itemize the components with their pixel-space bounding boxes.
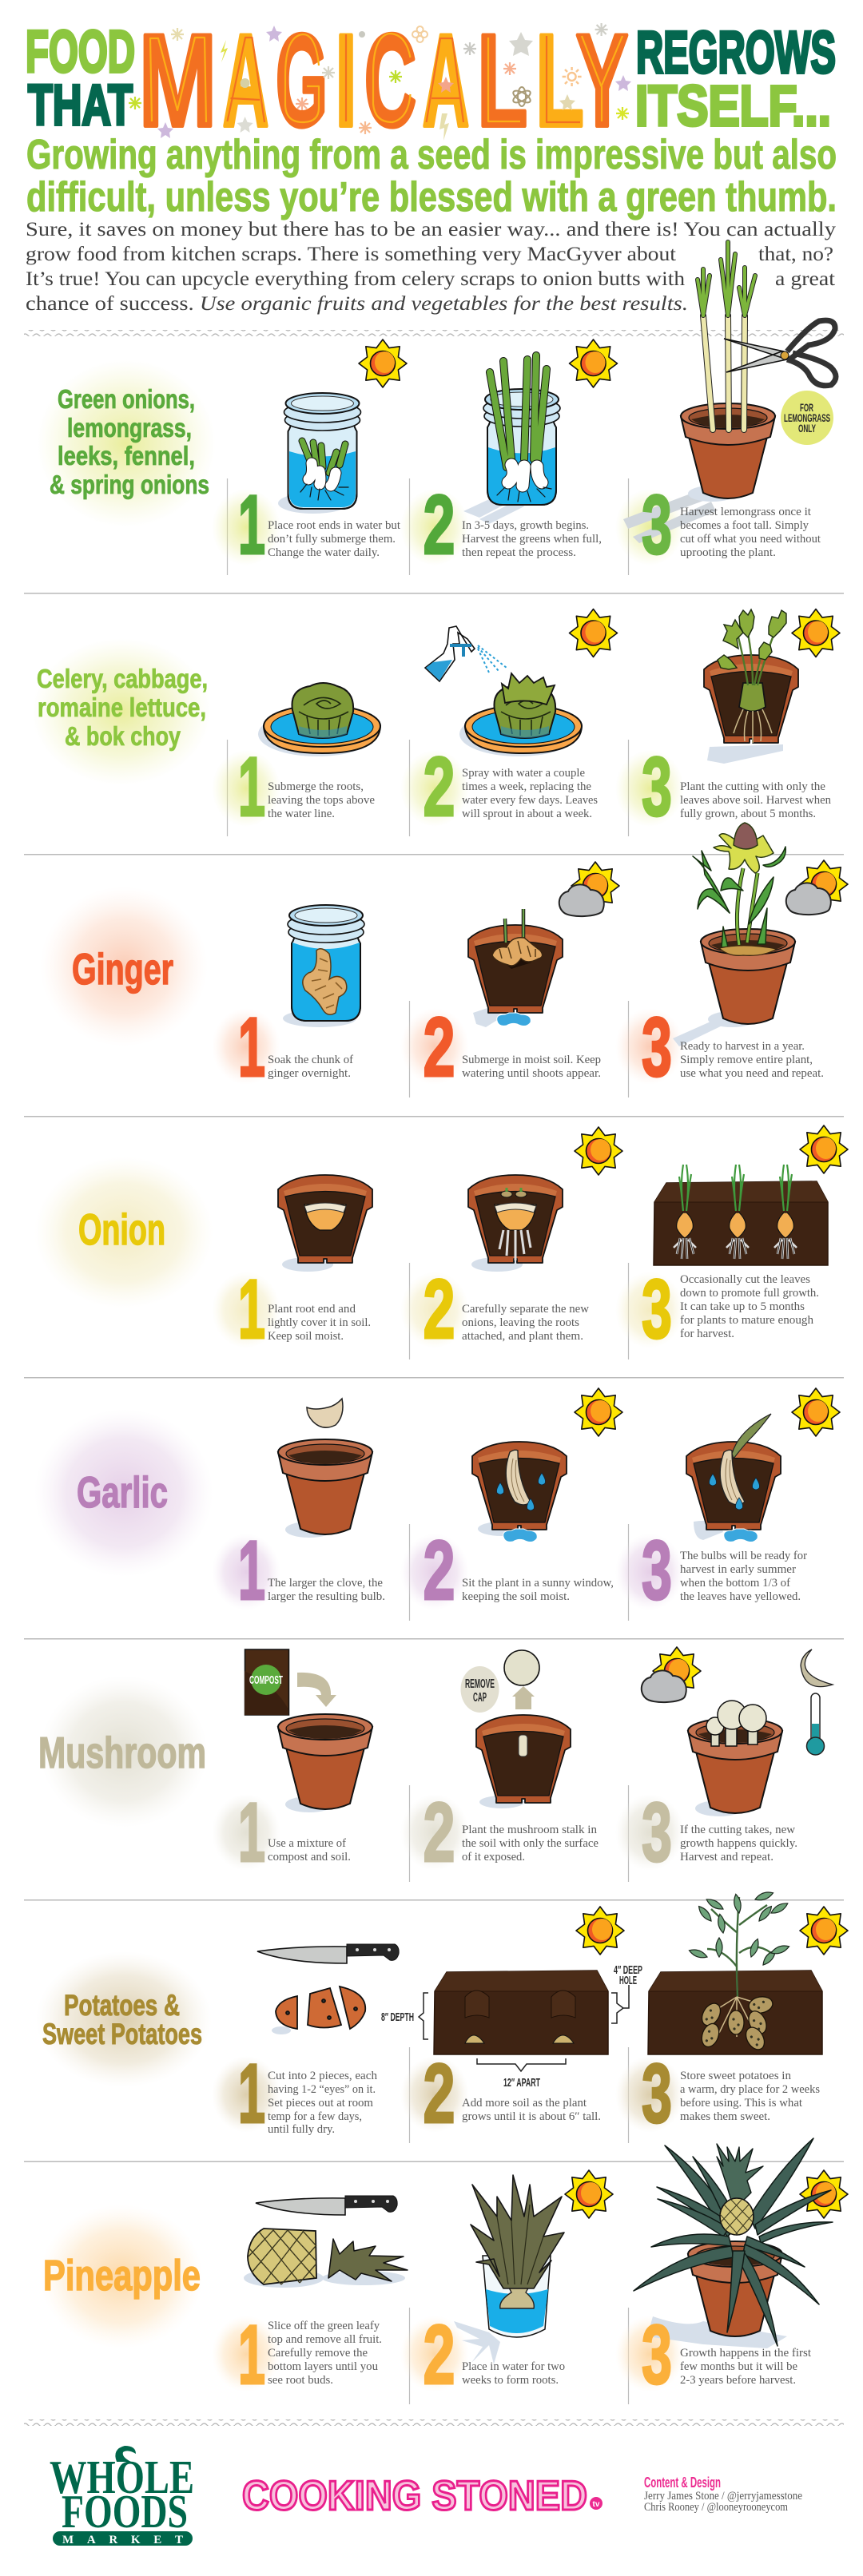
panel: potatoes — [36, 1890, 848, 2143]
step 2 — [400, 1650, 599, 1879]
step text: harvest in early summer — [680, 1563, 796, 1576]
celery plant — [718, 609, 786, 743]
step text: weeks to form roots. — [462, 2374, 559, 2387]
step text: lightly cover it in soil. — [268, 1316, 371, 1329]
sun — [800, 1907, 848, 1955]
step text: If the cutting takes, new — [680, 1824, 795, 1836]
step text: Store sweet potatoes in — [680, 2070, 791, 2082]
step text — [680, 1040, 824, 1080]
heading: romaine lettuce, — [38, 693, 206, 722]
step 2 — [400, 339, 617, 572]
step text: Harvest lemongrass once it — [680, 506, 812, 518]
heading: Garlic — [77, 1467, 168, 1517]
intro text — [26, 219, 837, 315]
heading: Pineapple — [43, 2252, 201, 2300]
badge: for lemongrass only — [781, 391, 833, 445]
pineapple crown — [471, 2175, 564, 2308]
title: magically — [139, 6, 628, 153]
ginger root — [303, 949, 347, 1014]
logo: cooking stoned: tv — [593, 2500, 600, 2509]
step text: bottom layers until you — [268, 2360, 378, 2373]
labels: HOLE — [619, 1974, 637, 1987]
moon — [801, 1649, 833, 1687]
step text: top and remove all fruit. — [268, 2333, 382, 2346]
labels: 12″ APART — [503, 2076, 540, 2090]
step text — [268, 780, 375, 820]
step text: growth happens quickly. — [680, 1837, 797, 1850]
step text: cut off what you need without — [680, 533, 821, 546]
step text: leaving the tops above — [268, 794, 375, 807]
sun and cloud — [559, 862, 619, 916]
step text: temp for a few days, — [268, 2110, 362, 2123]
intro text: that, no? — [758, 244, 833, 265]
step text: Soak the chunk of — [268, 1054, 353, 1066]
heading — [42, 1989, 202, 2050]
intro text: grow food from kitchen scraps. There is something very MacGyver about — [26, 244, 676, 265]
step text: a warm, dry place for 2 weeks — [680, 2083, 820, 2096]
pineapple body — [248, 2229, 316, 2284]
step text: don’t fully submerge them. — [268, 533, 396, 546]
badge: remove cap — [460, 1666, 499, 1713]
title: food: FOOD — [26, 18, 135, 85]
sun — [569, 609, 617, 657]
large pineapple plant — [634, 2138, 833, 2346]
step 3 — [615, 1647, 833, 1879]
sun — [800, 2170, 848, 2218]
credits — [644, 2475, 802, 2514]
large pot — [688, 2241, 782, 2340]
blob — [34, 1409, 213, 1577]
badge: remove cap: CAP — [473, 1691, 487, 1705]
step text: Change the water daily. — [268, 546, 380, 559]
number: 3 — [642, 1263, 672, 1356]
title: magically: M — [139, 6, 217, 153]
mushrooms — [706, 1701, 766, 1746]
step 1 — [212, 1649, 372, 1879]
step text — [268, 1303, 371, 1343]
intro text: a great — [775, 268, 835, 290]
step 1 — [212, 683, 380, 834]
badge: for lemongrass only: FOR — [800, 401, 813, 414]
step text: Use a mixture of — [268, 1837, 346, 1850]
step text — [462, 767, 598, 820]
step 1 — [212, 2196, 408, 2402]
step text — [268, 2070, 377, 2136]
step text: Keep soil moist. — [268, 1330, 344, 1343]
step text: until fully dry. — [268, 2123, 335, 2136]
step text: onions, leaving the roots — [462, 1316, 579, 1329]
garlic clove — [307, 1399, 343, 1427]
step 1 — [212, 339, 407, 572]
step text: Plant root end and — [268, 1303, 356, 1316]
step text — [268, 1837, 351, 1864]
number: 3 — [642, 2308, 672, 2402]
step text — [462, 1303, 589, 1343]
step 3 — [615, 1890, 848, 2141]
heading: Onion — [78, 1205, 165, 1254]
step 2 — [400, 609, 617, 834]
step text — [680, 1550, 807, 1603]
heading: Celery, cabbage, — [37, 664, 208, 693]
step text: Plant the mushroom stalk in — [462, 1824, 597, 1836]
pot — [681, 403, 775, 502]
glass — [483, 2256, 551, 2337]
step text — [680, 506, 821, 559]
sun — [576, 1907, 624, 1955]
intro text: It’s true! You can upcycle everything from celery scraps to onion butts with — [26, 268, 686, 290]
step text: Carefully separate the new — [462, 1303, 589, 1316]
step text: The bulbs will be ready for — [680, 1550, 807, 1562]
step text: fully grown, about 5 months. — [680, 808, 816, 820]
compost bag: COMPOST — [249, 1673, 283, 1687]
step text: the leaves have yellowed. — [680, 1590, 801, 1603]
step text — [680, 2070, 820, 2123]
step 3 — [615, 242, 836, 572]
step text: Submerge the roots, — [268, 780, 364, 793]
blob — [37, 359, 216, 527]
step text: makes them sweet. — [680, 2110, 770, 2123]
badge: remove cap: REMOVE — [465, 1677, 495, 1691]
step text: Occasionally cut the leaves — [680, 1273, 810, 1286]
labels: 8″ DEPTH — [381, 2010, 414, 2024]
lemongrass stalks — [698, 242, 755, 430]
logo: whole foods market: WHOLE — [50, 2451, 194, 2503]
heading: lemongrass, — [67, 413, 192, 443]
step text: larger the resulting bulb. — [268, 1590, 385, 1603]
step text: use what you need and repeat. — [680, 1067, 824, 1080]
number: 2 — [424, 2308, 455, 2402]
title: magically: L — [535, 6, 584, 153]
arrow — [512, 1686, 535, 1709]
step text — [462, 1577, 614, 1603]
arrow — [297, 1673, 336, 1707]
mushroom cap — [504, 1650, 539, 1685]
step text: Add more soil as the plant — [462, 2097, 587, 2110]
pineapple fruit — [717, 2144, 763, 2235]
ginger plant — [693, 823, 785, 955]
panel: green onions — [37, 242, 836, 575]
step text: It can take up to 5 months — [680, 1300, 805, 1313]
step text: down to promote full growth. — [680, 1287, 819, 1300]
step text: Cut into 2 pieces, each — [268, 2070, 377, 2082]
step 2 — [400, 2170, 613, 2402]
step text: for harvest. — [680, 1328, 734, 1340]
thermometer — [807, 1693, 825, 1755]
panel: ginger — [40, 823, 848, 1097]
decorative sparkles in title — [129, 23, 631, 141]
heading — [37, 664, 208, 751]
step text — [268, 2320, 382, 2387]
heading: Potatoes & — [64, 1989, 180, 2022]
step text: Place in water for two — [462, 2360, 565, 2373]
panel: celery — [32, 609, 840, 836]
compost bag — [245, 1649, 289, 1715]
number: 1 — [238, 1263, 265, 1356]
sun and cloud — [642, 1647, 701, 1702]
title: magically: Y — [575, 6, 628, 153]
labels: 4″ DEEP — [614, 1963, 642, 1977]
step text: when the bottom 1/3 of — [680, 1577, 790, 1590]
credits: Jerry James Stone / @jerryjamesstone — [644, 2490, 802, 2503]
sun — [800, 1125, 848, 1173]
scissors — [724, 320, 836, 386]
blob — [40, 2205, 203, 2348]
step text: then repeat the process. — [462, 546, 576, 559]
logo: cooking stoned: COOKING STONED — [242, 2473, 587, 2519]
sun — [575, 1127, 622, 1175]
heading: Ginger — [72, 944, 173, 994]
step 2 — [400, 1388, 622, 1617]
number: 2 — [424, 1263, 455, 1356]
step 1 — [212, 1175, 372, 1356]
step text: compost and soil. — [268, 1851, 351, 1864]
step text: becomes a foot tall. Simply — [680, 519, 809, 532]
step text: having 1-2 “eyes” on it. — [268, 2083, 376, 2096]
number: 3 — [642, 740, 672, 834]
step text — [462, 519, 602, 559]
step text: attached, and plant them. — [462, 1330, 583, 1343]
number: 2 — [424, 2047, 455, 2141]
subheading — [26, 132, 837, 220]
blob — [40, 887, 208, 1046]
step text: see root buds. — [268, 2374, 333, 2387]
step text: Growth happens in the first — [680, 2347, 812, 2360]
step text: Simply remove entire plant, — [680, 1054, 813, 1066]
step text: the water line. — [268, 808, 335, 820]
sun — [359, 339, 407, 387]
step text: Slice off the green leafy — [268, 2320, 380, 2332]
step text: Set pieces out at room — [268, 2097, 373, 2110]
step text: Carefully remove the — [268, 2347, 368, 2360]
step text: Harvest and repeat. — [680, 1851, 774, 1864]
step 3 — [615, 1388, 840, 1617]
step 3 — [615, 2138, 848, 2402]
step 1 — [212, 1399, 385, 1617]
logo: whole foods market — [50, 2446, 194, 2546]
number: 2 — [424, 740, 455, 834]
number: 2 — [424, 478, 455, 572]
credits: Chris Rooney / @looneyrooneycom — [644, 2501, 788, 2514]
step 2 — [400, 1127, 622, 1356]
number: 2 — [424, 1786, 455, 1879]
step text: water every few days. Leaves — [462, 794, 598, 807]
step text: The larger the clove, the — [268, 1577, 383, 1590]
number: 2 — [424, 1001, 455, 1094]
step 2 — [381, 1907, 642, 2141]
title: magically: A — [422, 6, 470, 153]
step 3 — [615, 609, 840, 834]
number: 3 — [642, 1001, 672, 1094]
number: 1 — [238, 478, 265, 572]
number: 1 — [238, 2308, 265, 2402]
step text: uprooting the plant. — [680, 546, 776, 559]
heading — [50, 384, 209, 499]
heading: & bok choy — [65, 721, 181, 751]
step text: In 3-5 days, growth begins. — [462, 519, 589, 532]
step text: for plants to mature enough — [680, 1314, 813, 1327]
step text: before using. This is what — [680, 2097, 803, 2110]
step 1 — [212, 1944, 399, 2141]
title: that: THAT — [28, 74, 133, 137]
heading: & spring onions — [50, 470, 209, 499]
potato pieces — [272, 1987, 365, 2034]
blob — [34, 1157, 213, 1308]
badge: for lemongrass only: ONLY — [798, 422, 816, 435]
number: 1 — [238, 1524, 265, 1617]
heading: Mushroom — [38, 1728, 206, 1777]
heading: Green onions, — [58, 384, 195, 414]
number: 3 — [642, 2047, 672, 2141]
sun — [565, 2170, 613, 2218]
step text: Ready to harvest in a year. — [680, 1040, 805, 1053]
intro text: Sure, it saves on money but there has to be an easier way... and there is! You can actually — [26, 219, 837, 240]
step text — [268, 1054, 353, 1080]
title: magically: L — [477, 6, 527, 153]
panel: mushroom — [38, 1647, 833, 1882]
pineapple top — [328, 2239, 408, 2281]
sun — [569, 339, 617, 387]
labels — [381, 1963, 642, 2090]
blob — [40, 1676, 208, 1828]
step text — [268, 1577, 385, 1603]
title: magically: G — [276, 6, 328, 153]
step 2 — [400, 862, 619, 1094]
flower — [714, 823, 774, 873]
logo: whole foods market: MARKET — [62, 2534, 183, 2546]
potato plant — [688, 1890, 790, 2053]
step text: of it exposed. — [462, 1851, 525, 1864]
number: 3 — [642, 478, 672, 572]
brackets — [419, 1985, 629, 2071]
sun — [792, 1388, 840, 1436]
intro text: chance of success. Use organic fruits and vegetables for the best results. — [26, 293, 688, 315]
step 3 — [615, 1125, 848, 1356]
title — [26, 6, 836, 153]
step text: Place root ends in water but — [268, 519, 401, 532]
step text — [462, 2360, 565, 2387]
panel: garlic — [34, 1388, 840, 1621]
step text: few months but it will be — [680, 2360, 797, 2373]
step text: Spray with water a couple — [462, 767, 585, 780]
step text: grows until it is about 6″ tall. — [462, 2110, 601, 2123]
number: 1 — [238, 1786, 265, 1879]
heading: leeks, fennel, — [58, 441, 195, 470]
step text — [680, 1273, 819, 1340]
step text — [268, 519, 401, 559]
title: magically: C — [364, 6, 416, 153]
heading: Sweet Potatoes — [42, 2018, 202, 2050]
badge: for lemongrass only: LEMONGRASS — [784, 411, 830, 424]
step text: keeping the soil moist. — [462, 1590, 570, 1603]
number: 3 — [642, 1786, 672, 1879]
number: 1 — [238, 740, 265, 834]
step text: Plant the cutting with only the — [680, 780, 825, 793]
blob — [36, 1951, 212, 2087]
step text: Sit the plant in a sunny window, — [462, 1577, 614, 1590]
step 3 — [615, 823, 848, 1094]
step text — [462, 2097, 601, 2123]
step text — [680, 2347, 812, 2387]
number: 3 — [642, 1524, 672, 1617]
sun and cloud — [786, 860, 848, 915]
step text: ginger overnight. — [268, 1067, 351, 1080]
sun — [792, 609, 840, 657]
panel: pineapple — [40, 2138, 848, 2404]
number: 2 — [424, 1524, 455, 1617]
title: magically: A — [222, 6, 268, 153]
step text — [462, 1054, 601, 1080]
blob — [32, 638, 211, 785]
step text — [680, 1824, 797, 1864]
step text: watering until shoots appear. — [462, 1067, 601, 1080]
step text: 2-3 years before harvest. — [680, 2374, 796, 2387]
step text: the soil with only the surface — [462, 1837, 599, 1850]
panel: onion — [34, 1125, 848, 1359]
step text: Harvest the greens when full, — [462, 533, 602, 546]
step text — [462, 1824, 599, 1864]
step text: Submerge in moist soil. Keep — [462, 1054, 601, 1066]
logo: whole foods market: FOODS — [62, 2485, 188, 2538]
credits: Content & Design — [644, 2475, 721, 2491]
spray bottle — [425, 626, 507, 681]
step text — [680, 780, 831, 820]
sun — [575, 1388, 622, 1436]
number: 1 — [238, 1001, 265, 1094]
step 1 — [212, 905, 364, 1094]
step text: will sprout in about a week. — [462, 808, 592, 820]
step text: times a week, replacing the — [462, 780, 591, 793]
number: 1 — [238, 2047, 265, 2141]
step text: leaves above soil. Harvest when — [680, 794, 831, 807]
title: magically: I — [335, 6, 357, 153]
